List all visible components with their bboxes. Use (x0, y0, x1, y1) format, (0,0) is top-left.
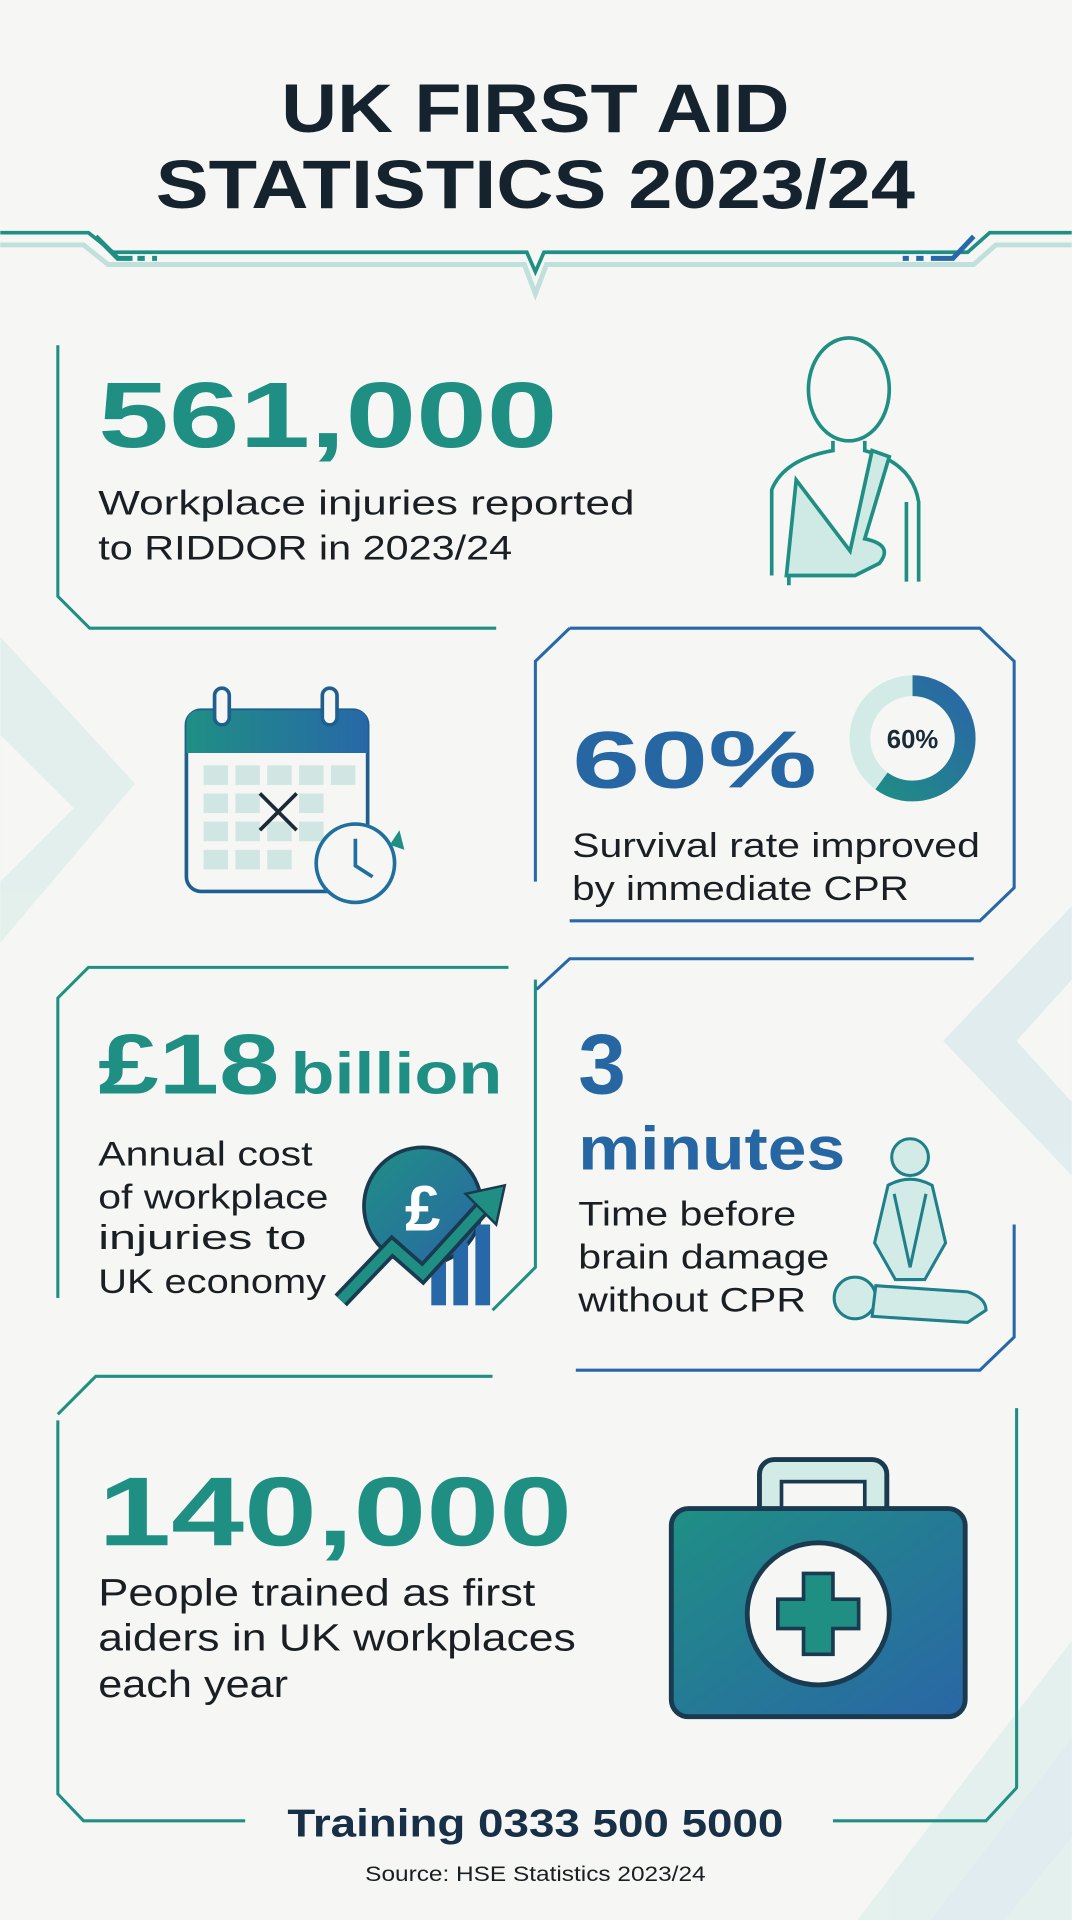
panel: £18 billion: Annual cost (98, 1136, 313, 1174)
panel: 561,000 injuries: Workplace injuries reported (98, 484, 635, 522)
icon: person with arm sling (772, 338, 919, 585)
header decoration (0, 233, 1072, 294)
panel: £18 billion: UK economy (98, 1263, 327, 1301)
panel: 60% survival: Survival rate improved (572, 827, 980, 865)
chart: donut 60%: 60% (887, 726, 938, 754)
panel: 561,000 injuries: 561,000 (98, 363, 557, 467)
panel: £18 billion: of workplace (98, 1179, 328, 1217)
panel: 60% survival: by immediate CPR (572, 870, 909, 908)
panel: £18 billion (58, 967, 535, 1310)
panel: 561,000 injuries (58, 338, 919, 628)
panel: £18 billion: injuries to (98, 1219, 306, 1257)
icon: calendar with clock (186, 688, 404, 902)
panel: 60% survival (535, 628, 1014, 921)
footer: training phone: Source: HSE Statistics 2023/24 (365, 1863, 706, 1886)
panel: 3 minutes (537, 959, 1014, 1370)
panel: 140,000 first aiders: People trained as first (98, 1572, 536, 1614)
panel: £18 billion: billion (290, 1041, 502, 1106)
icon: CPR figure (834, 1139, 986, 1322)
panel: 140,000 first aiders: each year (98, 1664, 288, 1706)
footer: training phone (287, 1803, 783, 1886)
panel: 3 minutes: minutes (578, 1114, 845, 1182)
panel: 60% survival: 60% (572, 715, 817, 805)
footer: training phone: Training 0333 500 5000 (287, 1803, 783, 1846)
title (156, 70, 915, 223)
icon: pound coin with rising arrow (341, 1147, 505, 1305)
panel: 3 minutes: without CPR (577, 1281, 806, 1319)
title: STATISTICS 2023/24 (156, 146, 915, 223)
panel: 561,000 injuries: to RIDDOR in 2023/24 (98, 530, 512, 568)
icon: pound coin with rising arrow: £ (405, 1174, 440, 1245)
panel: 140,000 first aiders: 140,000 (98, 1456, 572, 1566)
icon: first aid kit (671, 1460, 965, 1717)
title: UK FIRST AID (281, 70, 789, 147)
panel: 140,000 first aiders (58, 1376, 1017, 1821)
panel: £18 billion: £18 (98, 1016, 279, 1112)
background decorative shapes (0, 637, 1072, 1920)
chart: donut 60% (860, 686, 965, 791)
panel: 3 minutes: 3 (578, 1016, 626, 1112)
panel: 140,000 first aiders: aiders in UK workplaces (98, 1618, 576, 1660)
panel: 3 minutes: Time before (578, 1196, 796, 1234)
panel: 3 minutes: brain damage (578, 1239, 829, 1277)
